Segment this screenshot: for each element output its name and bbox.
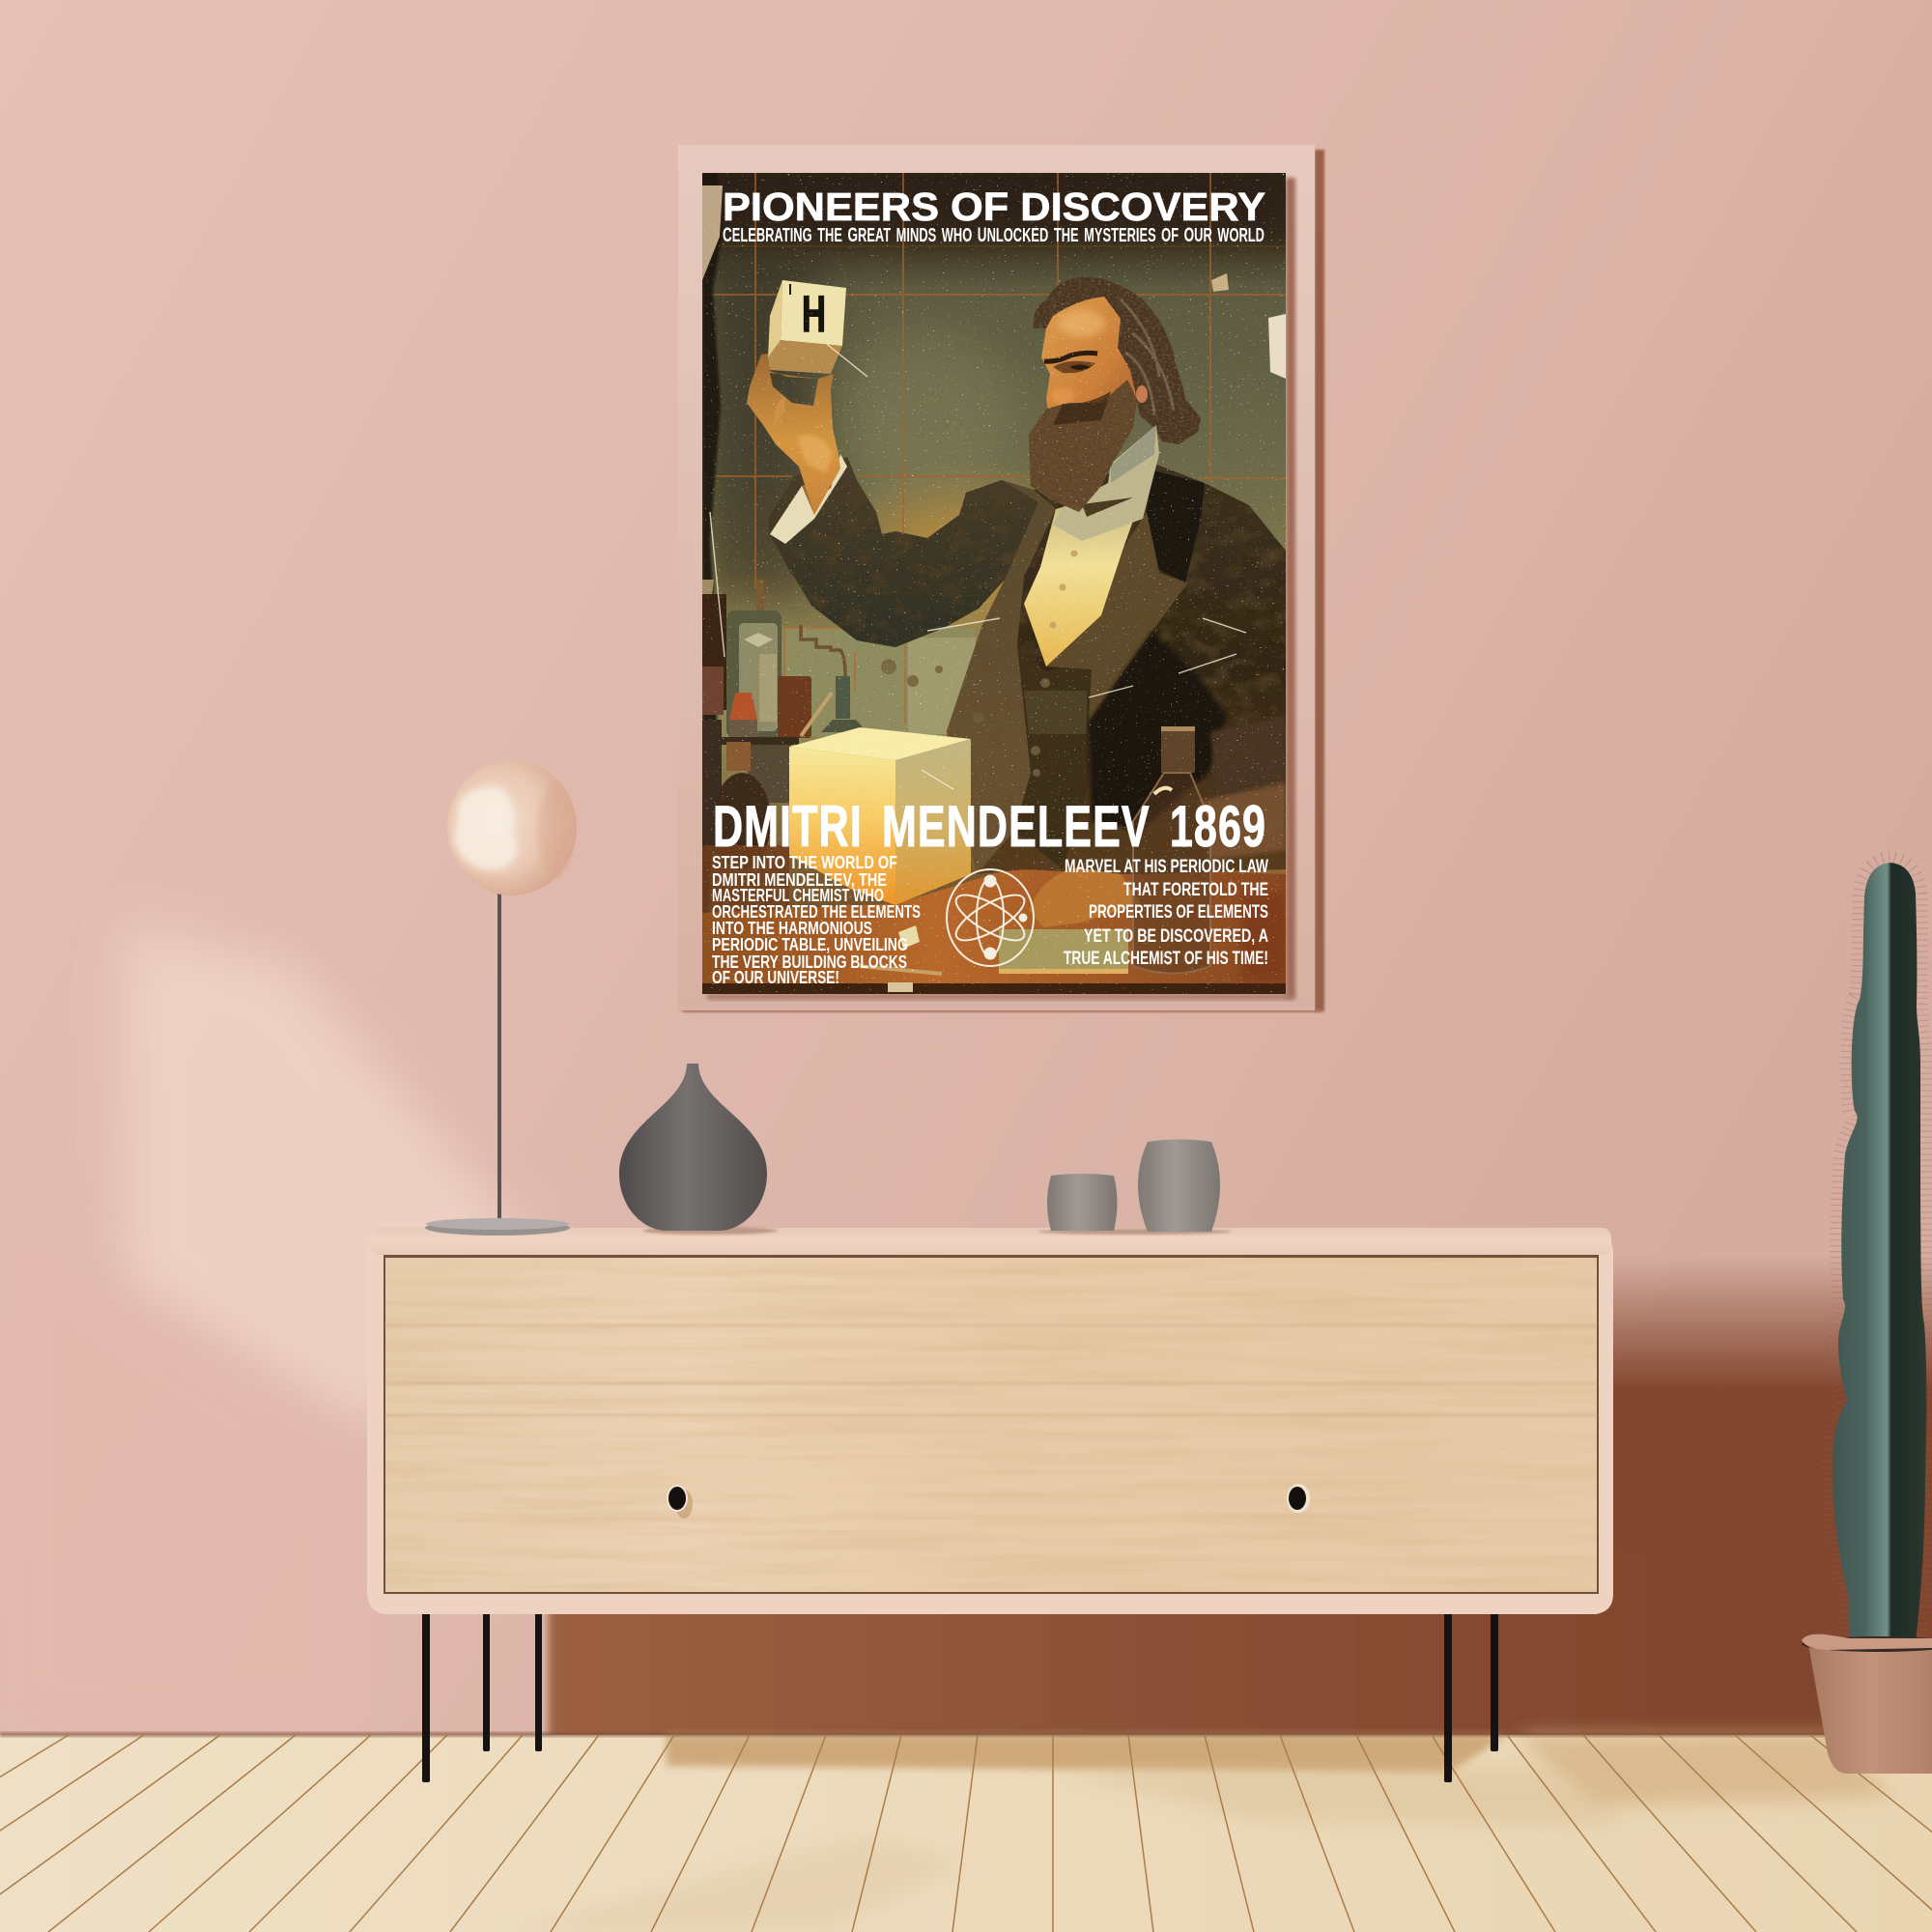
- table: [702, 869, 1286, 983]
- left paragraph: DMITRI MENDELEEV, THE: [712, 870, 887, 890]
- man: left coat panel: [947, 480, 1056, 874]
- left paragraph: INTO THE HARMONIOUS: [712, 919, 872, 938]
- poster title: PIONEERS OF DISCOVERY: [723, 185, 1265, 229]
- icon: atom: [947, 869, 1034, 966]
- pot: [1802, 1634, 1932, 1774]
- wall tile lines: [702, 173, 1286, 589]
- man: waistcoat: [1018, 645, 1092, 869]
- right paragraph: YET TO BE DISCOVERED, A: [1084, 926, 1268, 947]
- poster artwork: [702, 173, 1286, 994]
- man: sleeve: [768, 457, 1038, 647]
- cabinet shadow on wall: [549, 1256, 1932, 1739]
- cactus body: [1833, 863, 1926, 1642]
- man: face: [1041, 297, 1137, 430]
- scientist name and year: DMITRI MENDELEEV 1869: [713, 794, 1266, 859]
- left peeling edge: [702, 173, 723, 994]
- left paragraph: ORCHESTRATED THE ELEMENTS: [712, 902, 921, 922]
- H cube: H: [802, 286, 826, 343]
- glass bottle: [1133, 726, 1210, 974]
- resting hand: [1029, 867, 1141, 927]
- frame: [678, 145, 1324, 1012]
- left paragraph: PERIODIC TABLE, UNVEILING: [712, 935, 908, 954]
- poster subtitle: CELEBRATING THE GREAT MINDS WHO UNLOCKED THE MYSTERIES OF OUR WORLD: [723, 224, 1264, 246]
- distress texture: [702, 173, 1286, 994]
- left paragraph: OF OUR UNIVERSE!: [712, 968, 839, 987]
- tray: [999, 929, 1128, 971]
- man: right lapel: [1046, 512, 1188, 722]
- right paragraph: PROPERTIES OF ELEMENTS: [1089, 902, 1268, 923]
- big white cube: [789, 727, 971, 905]
- right paragraph: MARVEL AT HIS PERIODIC LAW: [1065, 857, 1268, 877]
- man: forearm: [1210, 715, 1286, 802]
- small block on table: [898, 925, 920, 949]
- vase: [619, 1064, 778, 1235]
- man: black collar: [1147, 470, 1205, 582]
- man: coat body: [947, 464, 1286, 874]
- man: collar and cravat: [1053, 425, 1159, 541]
- knobs: [667, 1484, 1310, 1519]
- right paragraph: THAT FORETOLD THE: [1123, 880, 1268, 900]
- cups: [1038, 1140, 1232, 1235]
- body: [367, 1228, 1613, 1614]
- man: cuff: [770, 454, 847, 544]
- drawer: [384, 1255, 1599, 1594]
- right paragraph: [1064, 857, 1268, 969]
- H cube: [768, 280, 846, 374]
- left paragraph: STEP INTO THE WORLD OF: [712, 853, 897, 872]
- floor: [0, 1732, 1932, 1932]
- lamp: [425, 760, 577, 1236]
- framed poster: [678, 145, 1362, 1034]
- left paragraph: MASTERFUL CHEMIST WHO: [712, 886, 884, 905]
- man: beard: [1029, 380, 1137, 512]
- man: lower dark coat: [1089, 631, 1227, 831]
- left paragraph: THE VERY BUILDING BLOCKS: [712, 952, 907, 972]
- scratches: [710, 345, 1246, 789]
- cactus plant: [1802, 863, 1932, 1774]
- cabinet: [367, 1228, 1613, 1782]
- left paragraph: [712, 853, 921, 987]
- man: hair: [1034, 277, 1201, 444]
- man: shirt: [1024, 506, 1132, 667]
- man: hand: [747, 354, 840, 515]
- right paragraph: TRUE ALCHEMIST OF HIS TIME!: [1064, 949, 1268, 969]
- legs: [422, 1611, 1498, 1782]
- lab equipment: [702, 580, 976, 913]
